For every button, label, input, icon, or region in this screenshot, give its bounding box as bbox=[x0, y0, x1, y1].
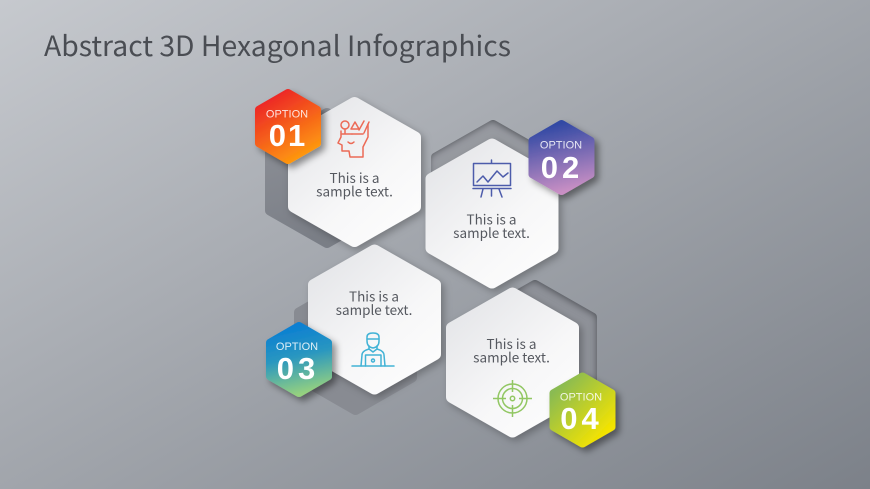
text: sample 3: sample text. bbox=[336, 299, 412, 319]
icon: presentation board bbox=[473, 160, 511, 197]
text: sample 4: This is a bbox=[486, 333, 536, 353]
back hexagon 4 bbox=[478, 285, 592, 415]
hexagon panel 4 bbox=[452, 294, 573, 432]
badge: option 01 bbox=[259, 93, 317, 160]
badge: option 03 bbox=[270, 326, 328, 393]
back hexagon 2 bbox=[436, 125, 550, 255]
badge: option 02: OPTION bbox=[540, 140, 582, 152]
text: sample 3: This is a bbox=[349, 286, 399, 306]
text: sample 3 bbox=[336, 286, 412, 319]
hexagon panel 3 bbox=[314, 250, 435, 388]
text: sample 2: This is a bbox=[466, 208, 516, 228]
badge: option 03: 03 bbox=[277, 351, 319, 386]
badge: option 03: OPTION bbox=[276, 341, 318, 353]
badge: option 04: OPTION bbox=[560, 392, 602, 404]
panel: option 1 bbox=[294, 103, 415, 241]
panel: option 4 bbox=[452, 294, 573, 432]
title: Abstract 3D Hexagonal Infographics bbox=[44, 25, 511, 65]
text: sample 2 bbox=[453, 208, 530, 242]
badge: option 02: 02 bbox=[541, 150, 583, 185]
badge: option 01: 01 bbox=[269, 118, 307, 153]
icon: target bbox=[493, 380, 532, 417]
badge: option 02 bbox=[532, 124, 590, 191]
icon: person at laptop bbox=[352, 333, 394, 366]
text: sample 4 bbox=[473, 333, 550, 366]
back hexagon 1 bbox=[270, 113, 384, 243]
hexagon panel 1 bbox=[294, 103, 415, 241]
text: sample 1: sample text. bbox=[316, 180, 393, 200]
text: sample 1: This is a bbox=[330, 167, 380, 187]
panel: option 2 bbox=[432, 144, 552, 282]
back hexagon 3 bbox=[299, 280, 412, 410]
badge: option 04: 04 bbox=[560, 401, 603, 436]
panel: option 3 bbox=[314, 250, 435, 388]
text: sample 4: sample text. bbox=[473, 346, 550, 366]
icon: head with ideas bbox=[338, 121, 369, 157]
badge: option 04 bbox=[554, 376, 612, 444]
hexagon panel 2 bbox=[432, 144, 552, 282]
badge: option 01: OPTION bbox=[266, 108, 308, 120]
text: sample 2: sample text. bbox=[453, 222, 530, 242]
text: sample 1 bbox=[316, 167, 393, 200]
